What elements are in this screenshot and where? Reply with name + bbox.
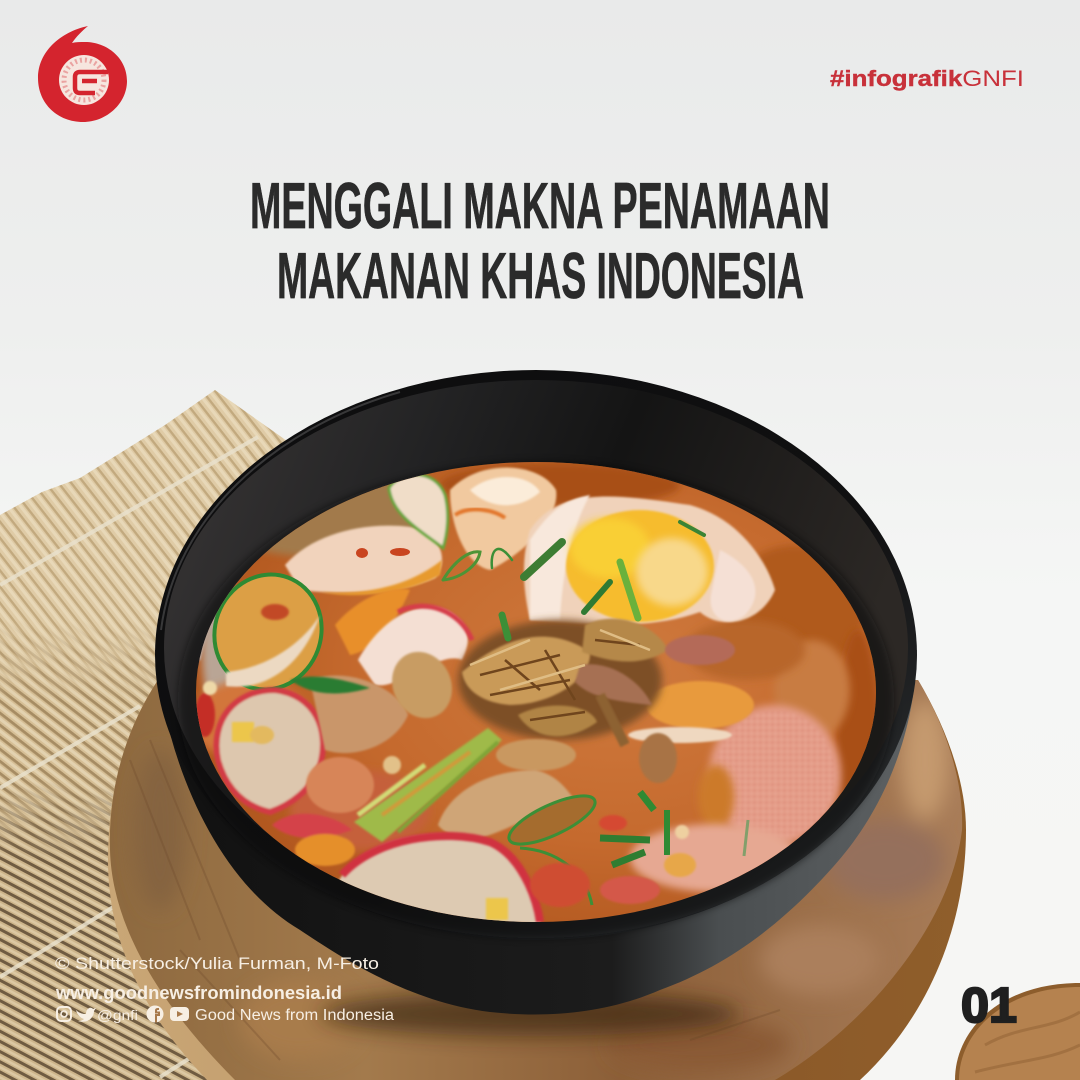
fried shallots [458,619,668,745]
board surface [110,680,962,1080]
social row [57,1006,394,1024]
mushroom slice [438,770,575,838]
onion strips on egg [443,522,704,638]
egg yolk [566,510,714,622]
board side [108,680,966,1080]
page number: 01 [961,979,1017,1033]
logo medallion [59,55,109,105]
cucumber slice left [212,572,324,690]
red-rim slice left [195,690,323,812]
icon: instagram [57,1007,71,1021]
bowl rim [155,370,917,940]
rim highlight [161,392,400,630]
bowl body [155,650,917,1014]
fish cake upper [285,526,442,595]
facebook and youtube name: Good News from Indonesia [195,1007,394,1024]
soup texture [190,463,880,892]
spoon [955,983,1080,1080]
logo letter G [75,72,108,93]
wooden board [108,680,966,1080]
logo [38,26,127,122]
black bowl [155,370,917,1014]
green onion ring [503,787,748,905]
red-rim slice bottom [338,834,540,925]
egg white left [450,467,556,570]
bowl shadow [320,992,740,1036]
icon: facebook [146,1006,164,1022]
green leaf left [290,677,370,693]
meat slice [310,675,408,753]
fried shallot pieces [381,642,677,783]
red and orange bits [203,635,735,907]
title [250,169,830,312]
icon: youtube [170,1007,189,1021]
icon: twitter [76,1008,96,1022]
website: www.goodnewsfromindonesia.id [55,983,342,1003]
green onion stalks [354,728,502,842]
orange pieces [335,589,410,655]
soup [190,462,880,925]
egg white right [524,496,775,625]
inner wall [164,380,908,916]
handle: @gnfi [97,1007,138,1023]
cucumber slice top [389,475,448,548]
photo credit: © Shutterstock/Yulia Furman, M-Foto [55,954,379,973]
bamboo mat [0,385,300,1080]
red-rim slice mid [358,606,472,685]
board grain [130,700,949,1071]
hashtag: #infografik GNFI [830,66,1024,91]
